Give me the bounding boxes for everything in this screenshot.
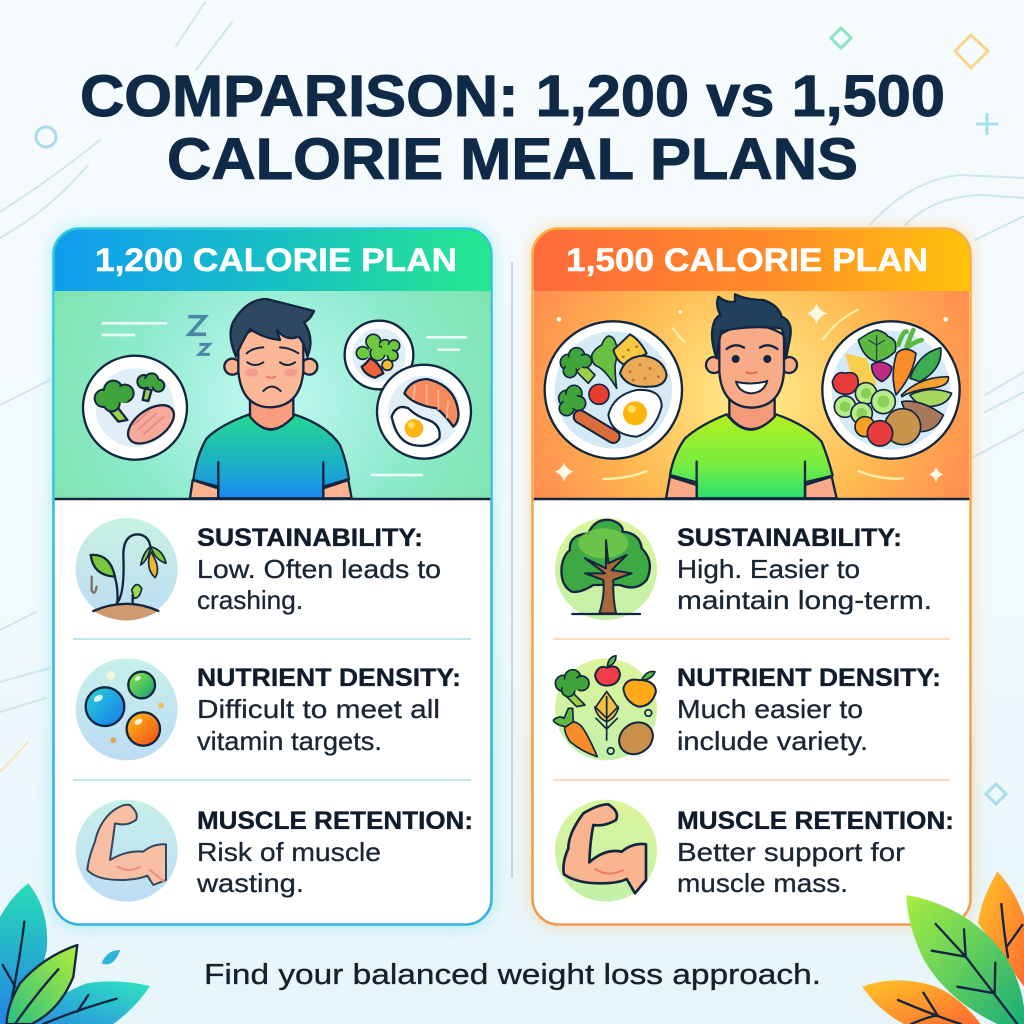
header: 1,200 calorie plan [53, 228, 492, 291]
icon: left plate mixed meal [545, 321, 682, 459]
title: CALORIE MEAL PLANS [167, 127, 858, 192]
row: sustainability [555, 518, 932, 620]
row: muscle retention [76, 800, 473, 902]
hero baseline rule [53, 498, 492, 500]
hero baseline rule [532, 498, 971, 500]
sleep z letters [188, 317, 210, 354]
text: nutrient density: NUTRIENT DENSITY: [677, 664, 941, 692]
center divider [511, 262, 513, 878]
panel: 1,200 calorie plan [53, 228, 492, 925]
footer tagline: Find your balanced weight loss approach. [204, 959, 821, 991]
figure: tired man [190, 299, 352, 498]
row: muscle retention [555, 800, 954, 902]
row: nutrient density [76, 658, 461, 760]
text: nutrient density [197, 664, 461, 756]
text: sustainability: SUSTAINABILITY: [677, 524, 902, 552]
text: sustainability: SUSTAINABILITY: [197, 524, 423, 552]
icon: drooping sprout [76, 518, 178, 620]
figure: happy man [666, 294, 837, 498]
card border [532, 228, 970, 924]
sparkles [555, 303, 948, 482]
text: sustainability: High. Easier to [677, 554, 860, 584]
icon: right plate vegetables [822, 321, 960, 459]
text: sustainability: crashing. [197, 585, 303, 615]
icon: bottom-left leaves [0, 883, 150, 1024]
icon: vitamin spheres [76, 658, 178, 760]
panel: 1,500 calorie plan [532, 228, 971, 925]
title [80, 64, 945, 192]
text: muscle retention: wasting. [196, 868, 304, 898]
text: nutrient density: vitamin targets. [197, 726, 382, 756]
text: muscle retention: MUSCLE RETENTION: [677, 807, 954, 835]
text: nutrient density: Difficult to meet all [197, 694, 440, 724]
text: muscle retention: muscle mass. [677, 868, 848, 898]
icon: healthy tree [555, 518, 657, 620]
title: COMPARISON: 1,200 vs 1,500 [80, 64, 945, 129]
icon: left plate broccoli and meat [83, 356, 187, 460]
motion lines [103, 323, 466, 475]
icon: healthy foods [553, 656, 659, 761]
icon: small flexed arm [76, 800, 178, 902]
text: muscle retention: Better support for [677, 837, 905, 867]
text: nutrient density: NUTRIENT DENSITY: [197, 664, 461, 692]
text: muscle retention [677, 807, 954, 898]
header: 1,200 calorie plan: 1,200 CALORIE PLAN [95, 242, 457, 278]
card border [54, 228, 492, 924]
text: sustainability: maintain long-term. [677, 585, 932, 615]
text: nutrient density: include variety. [677, 726, 868, 756]
icon: small plate [345, 321, 413, 389]
icon: bottom-right leaves [862, 872, 1024, 1024]
hero illustration: happy man with full plates [532, 291, 971, 499]
header: 1,500 calorie plan [532, 228, 971, 291]
text: sustainability [677, 524, 932, 615]
background decoration [0, 2, 1024, 804]
header: 1,500 calorie plan: 1,500 CALORIE PLAN [566, 242, 928, 278]
icon: large flexed arm [555, 800, 657, 902]
icon: large plate salmon and egg [377, 365, 471, 459]
text: muscle retention: Risk of muscle [197, 837, 381, 867]
text: nutrient density: Much easier to [677, 694, 863, 724]
hero illustration: tired man with small plates [53, 291, 492, 499]
text: nutrient density [677, 664, 941, 756]
text: muscle retention [196, 807, 473, 898]
row: nutrient density [553, 656, 941, 761]
text: sustainability [197, 524, 441, 615]
row: sustainability [76, 518, 441, 620]
text: sustainability: Low. Often leads to [197, 554, 441, 584]
text: muscle retention: MUSCLE RETENTION: [197, 807, 473, 835]
